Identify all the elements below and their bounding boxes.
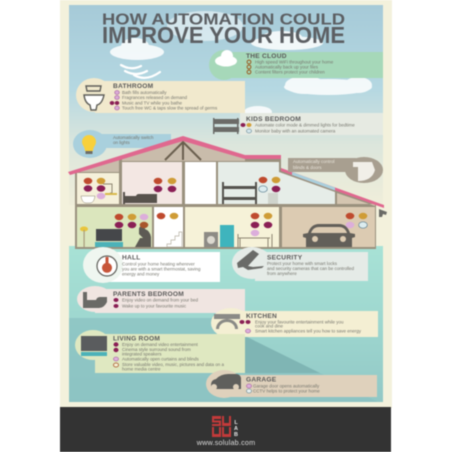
dots: bathroom [84, 178, 105, 199]
icon: light bulb [82, 135, 96, 154]
attic right [337, 193, 375, 206]
list [114, 298, 199, 308]
icon: bath fixtures [81, 184, 117, 203]
device dots [84, 177, 367, 236]
text: you are with a smart thermostat, saving [122, 266, 201, 272]
list: Fragrances released on demand [122, 95, 188, 100]
shadow triangle [245, 336, 320, 373]
room: kitchen [185, 207, 279, 247]
logo: B [234, 432, 238, 438]
list: Automatically back up your files [255, 64, 319, 70]
title: IMPROVE YOUR HOME [102, 22, 345, 48]
poster background [60, 0, 392, 408]
list: Music and TV while you bathe [122, 100, 182, 106]
panel: kitchen [211, 308, 378, 338]
callout text: on lights [113, 140, 131, 145]
skylight [292, 172, 335, 190]
list [240, 122, 355, 134]
roof right [281, 168, 384, 208]
text [267, 261, 355, 276]
logo: A [234, 426, 238, 432]
icon: car [211, 374, 241, 390]
room: stairs [154, 207, 183, 247]
icon: person on sofa [135, 226, 151, 247]
roof left [68, 136, 281, 175]
clouds [110, 11, 372, 118]
icon: toilet [84, 86, 104, 110]
list [114, 342, 225, 372]
room: living room [77, 207, 152, 247]
icon: cloud [215, 50, 237, 66]
icon: stairs [167, 232, 182, 247]
list: Enjoy your favourite entertainment while you [255, 320, 344, 324]
icon: washing machine [204, 232, 218, 247]
text: Control your home heating wherever [122, 262, 195, 266]
list: Garage door opens automatically [253, 384, 320, 388]
list: Touch free WC & taps slow the spread of germs [122, 106, 218, 110]
icon: television [81, 336, 107, 356]
icon: bed [83, 292, 107, 308]
dots: living room [115, 214, 148, 228]
room: kids bedroom [218, 162, 335, 204]
text: from anywhere [267, 271, 297, 276]
panel: security [232, 247, 368, 281]
list: Monitor baby with an automated camera [255, 128, 336, 134]
house walls [75, 139, 376, 249]
text: Protect your home with smart locks [267, 261, 338, 266]
dots: garage [346, 213, 367, 228]
icon: bunk bed [213, 118, 239, 134]
list: CCTV helps to protect your home [253, 388, 320, 394]
roof truss [165, 142, 201, 160]
icon: table and chairs [238, 234, 272, 247]
heading: KITCHEN [246, 313, 277, 320]
icon: fridge [220, 225, 234, 247]
list: Bath fills automatically [122, 90, 167, 95]
panel: hall [83, 247, 220, 283]
icon: car [303, 224, 355, 247]
text: and security cameras that can be controlled [267, 266, 355, 271]
panel: bathroom [76, 78, 245, 113]
list: Wake up to your favourite music [122, 304, 187, 308]
list: Enjoy on demand video entertainment [122, 342, 199, 347]
icon: thermostat [97, 256, 117, 276]
sky panel [69, 5, 383, 205]
list: Automatically open curtains and blinds [122, 356, 200, 362]
callout text: Automatically switch [113, 135, 154, 140]
text: energy and money [122, 272, 160, 276]
room: garage [282, 207, 375, 247]
icon: television [95, 229, 123, 247]
title [102, 12, 345, 48]
list: Content filters protect your children [255, 70, 325, 74]
heading: BATHROOM [113, 83, 154, 90]
logo [212, 416, 238, 438]
list: home media centre [122, 366, 161, 372]
icon: blinds [353, 162, 375, 181]
callout text: Automatically control [293, 159, 335, 164]
list: Smart kitchen appliances tell you how to save energy [255, 328, 362, 334]
list: Cinema style surround sound from [122, 347, 191, 352]
text [122, 262, 201, 276]
panel: kids bedroom [213, 113, 383, 135]
panel: living room [75, 330, 245, 373]
dots: hall [157, 213, 178, 219]
callout text [113, 135, 154, 145]
heading: PARENTS BEDROOM [113, 291, 184, 298]
room: bathroom [77, 173, 119, 204]
list [246, 384, 320, 394]
heading: SECURITY [267, 254, 303, 262]
list [110, 90, 218, 110]
heading: HALL [122, 254, 141, 262]
list: Automate color mode & dimmed lights for bedtime [255, 122, 355, 128]
footer [60, 407, 391, 452]
room: hall upper [185, 162, 216, 204]
panel: the cloud [209, 50, 383, 80]
icon: floor lamp [80, 226, 88, 247]
icon: bed upper left [123, 192, 157, 204]
callout: blinds [288, 157, 383, 183]
icon: wardrobe [268, 193, 278, 204]
url: www.solulab.com [196, 438, 255, 447]
attic left [77, 159, 119, 172]
dots: kids bedroom [259, 177, 280, 192]
list: High speed WiFi throughout your home [255, 60, 334, 64]
list: Store valuable video, music, pictures and data on a [122, 362, 225, 367]
heading: THE CLOUD [246, 53, 287, 60]
panel: parents bedroom [77, 286, 245, 313]
callout text [293, 159, 335, 170]
list [240, 320, 362, 334]
callout text: blinds & doors [293, 165, 322, 170]
list: integrated speakers [122, 352, 162, 356]
icon: camera [237, 250, 264, 270]
heading: GARAGE [246, 376, 277, 384]
dots: parents bedroom [154, 178, 176, 192]
heading: KIDS BEDROOM [246, 116, 301, 123]
ground shadow [69, 318, 378, 402]
icon: wifi arcs [121, 65, 160, 78]
icon: washing machine [214, 314, 240, 329]
room: parents bedroom [122, 162, 182, 204]
icon: bunk beds [222, 182, 257, 204]
logo: L [234, 420, 238, 426]
title: HOW AUTOMATION COULD [102, 12, 345, 28]
teal ground panel [69, 246, 383, 402]
callout: lights [73, 130, 171, 158]
attic centre [122, 140, 245, 161]
panel: garage [206, 370, 377, 398]
house [68, 136, 387, 249]
list [247, 60, 334, 74]
dots: kitchen [251, 213, 272, 236]
heading: LIVING ROOM [113, 336, 160, 342]
list: cook and dine [255, 324, 284, 328]
icon: security camera [379, 209, 387, 217]
list: Enjoy video on demand from your bed [122, 298, 199, 302]
